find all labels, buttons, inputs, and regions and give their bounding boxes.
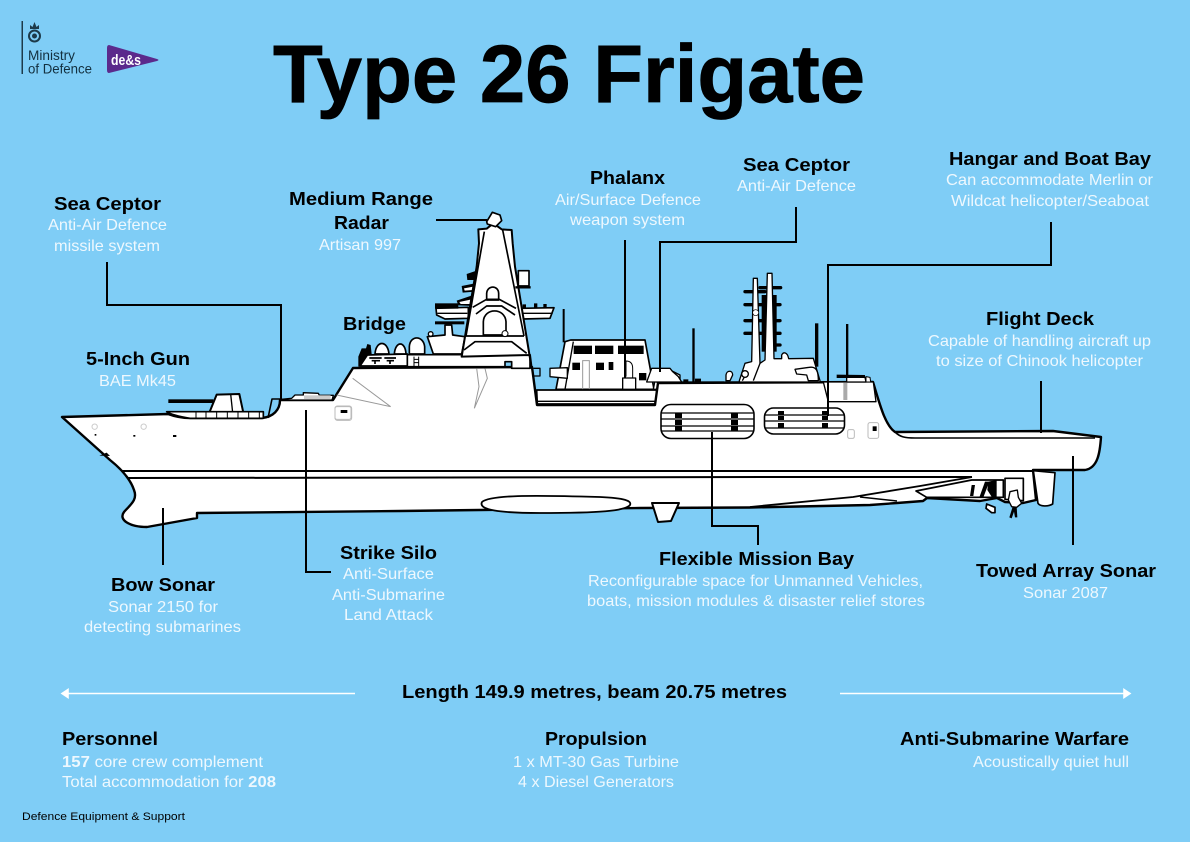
label: Flexible Mission Bay: Flexible Mission Bay [659,548,855,569]
ship: aft masts [647,273,879,438]
footer: Defence Equipment & Support [22,811,185,823]
label: Bow Sonar: Sonar 2150 for [108,599,219,616]
ship: stern gear [916,471,1055,518]
label: Medium Range Radar: Radar [334,212,389,233]
label: Strike Silo [332,542,445,624]
label: Flight Deck: to size of Chinook helicopter [936,353,1144,370]
label: Phalanx: Air/Surface Defence [555,192,701,209]
panel: propulsion: 1 x MT-30 Gas Turbine [513,754,679,771]
label: Strike Silo: Land Attack [344,607,434,624]
label: Sea Ceptor forward: Anti-Air Defence [48,217,167,234]
leader line: Medium Range Radar [436,219,487,221]
label: Medium Range Radar [289,188,433,254]
label: Sea Ceptor forward: Sea Ceptor [54,193,161,214]
label: Phalanx [555,167,701,229]
label: 5-Inch Gun: 5-Inch Gun [86,348,190,369]
leader line: Flexible Mission Bay [712,432,758,545]
label: 5-Inch Gun: BAE Mk45 [99,373,176,390]
label: Medium Range Radar: Artisan 997 [319,237,401,254]
panel: personnel: Total accommodation for 208 [62,774,276,791]
ship illustration [62,212,1101,527]
panel: personnel: Personnel [62,728,158,749]
Ministry of Defence logo [22,21,92,76]
label: Strike Silo: Strike Silo [340,542,437,563]
ship: sonar dome and fin [482,496,679,522]
label: Towed Array Sonar: Sonar 2087 [1023,585,1108,602]
label: Bridge: Bridge [343,313,406,334]
length and beam heading: Length 149.9 metres, beam 20.75 metres [402,681,787,702]
title: Type 26 Frigate [273,29,865,120]
panel: propulsion: 4 x Diesel Generators [518,774,674,791]
label: Hangar and Boat Bay: Can accommodate Merlin or [946,172,1154,189]
leader line: Hangar and Boat Bay [828,222,1051,416]
ship: mast ladder stubs [457,271,477,306]
leader line: Flight Deck [1040,381,1042,433]
panel: anti-submarine warfare: Anti-Submarine Warfare [900,728,1129,749]
label: Towed Array Sonar: Towed Array Sonar [976,560,1156,581]
Ministry of Defence logo: of Defence [28,60,92,76]
panel: personnel [62,728,276,791]
leader line: Strike Silo [306,410,331,572]
label: Bow Sonar: detecting submarines [84,619,241,636]
leader line: Sea Ceptor forward [107,262,281,400]
label: Towed Array Sonar [976,560,1156,602]
label: Medium Range Radar: Medium Range [289,188,433,209]
label: Strike Silo: Anti-Surface [343,566,434,583]
ship: flexible mission bay hatches [661,404,845,438]
arrow: length left [62,690,355,698]
ship: gun turret [92,393,352,456]
ship: bridge and forward mast [335,212,554,419]
label: Sea Ceptor aft [737,154,856,195]
panel: anti-submarine warfare: Acoustically quiet hull [973,754,1129,771]
leader line: Sea Ceptor aft [660,207,796,372]
panel: anti-submarine warfare [900,728,1129,771]
label: Sea Ceptor aft: Anti-Air Defence [737,178,856,195]
ship: radar platform right [522,303,554,319]
panel: propulsion: Propulsion [545,728,647,749]
label: Strike Silo: Anti-Submarine [332,587,445,604]
label: Sea Ceptor forward [48,193,167,255]
panel: propulsion [513,728,679,791]
label: Bow Sonar: Bow Sonar [111,574,215,595]
label: Bow Sonar [84,574,241,636]
label: Hangar and Boat Bay: Hangar and Boat Bay [949,148,1152,169]
panel: personnel: 157 core crew complement [62,754,264,771]
ship: main hull [62,367,1101,527]
arrow: length right [840,690,1130,698]
de&s logo [107,45,158,73]
label: Hangar and Boat Bay [946,148,1154,210]
label: Flexible Mission Bay: boats, mission modules & disaster relief stores [587,593,925,610]
label: Flight Deck [928,308,1151,370]
ship: aft superstructure [537,309,680,404]
ship: radar platform left [435,303,468,319]
label: Phalanx: weapon system [569,212,685,229]
leader line: Bow Sonar [162,508,164,565]
leader line: Phalanx [624,240,626,378]
label: Sea Ceptor aft: Sea Ceptor [743,154,850,175]
label: Flexible Mission Bay [587,548,925,610]
leader line: Towed Array Sonar [1072,456,1074,545]
label: Flight Deck: Capable of handling aircraft up [928,333,1151,350]
de&s logo: de&s [111,52,141,69]
label: Phalanx: Phalanx [590,167,666,188]
label: Sea Ceptor forward: missile system [54,238,160,255]
label: Flexible Mission Bay: Reconfigurable space for Unmanned Vehicles, [588,573,923,590]
ship: hull stripe lines [122,399,1095,507]
label: Flight Deck: Flight Deck [986,308,1095,329]
label: Hangar and Boat Bay: Wildcat helicopter/Seaboat [951,193,1150,210]
Ministry of Defence logo: Ministry [28,47,75,63]
label: 5-Inch Gun [86,348,190,390]
